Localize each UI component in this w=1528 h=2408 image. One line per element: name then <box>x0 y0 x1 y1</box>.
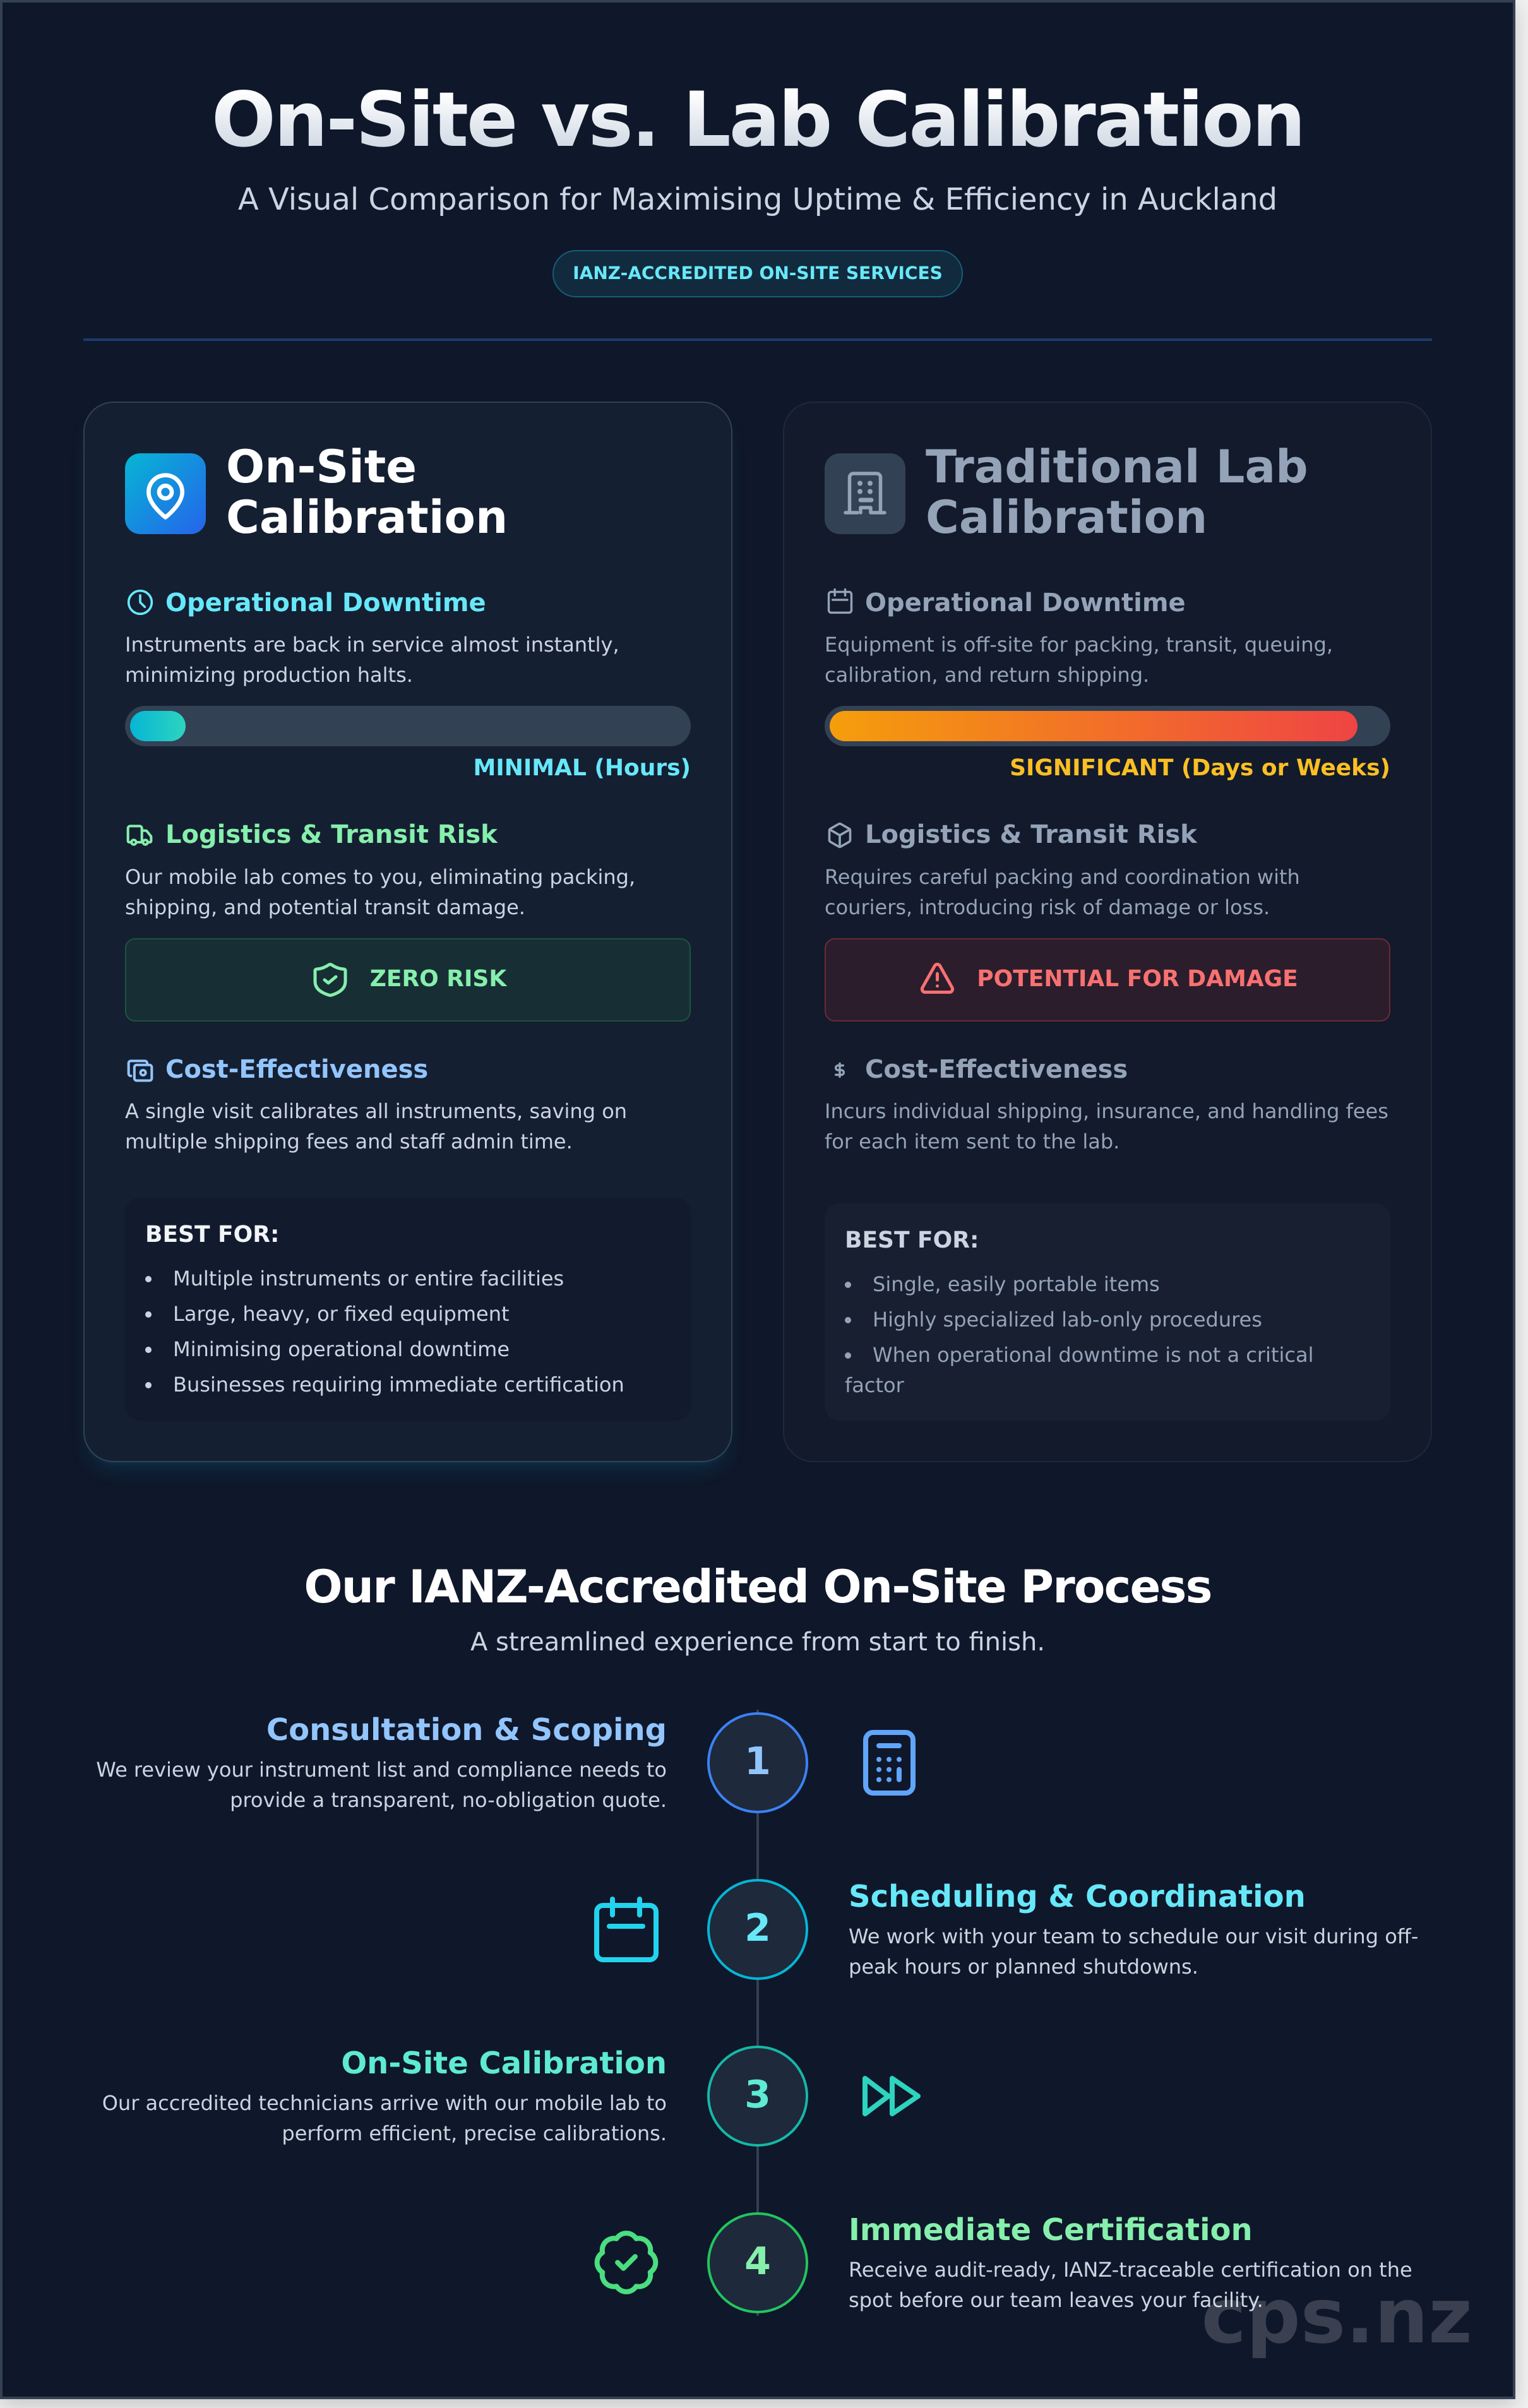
step 4 number <box>707 2212 808 2313</box>
best for list: BEST FOR: <box>845 1227 979 1253</box>
logistics text: couriers, introducing risk of damage or loss. <box>825 895 1270 919</box>
process section subtitle: A streamlined experience from start to finish. <box>470 1628 1045 1657</box>
header <box>212 76 1304 297</box>
step 1 <box>96 1712 916 1813</box>
best for list: When operational downtime is not a critical factor <box>845 1343 1313 1397</box>
step 1 number: 1 <box>744 1739 771 1784</box>
operational downtime text: Instruments are back in service almost instantly, <box>125 633 619 657</box>
panel: on-site calibration <box>83 402 732 1462</box>
icon: calculator <box>863 1730 916 1796</box>
logistics heading: Logistics & Transit Risk <box>165 820 498 849</box>
icon: clock <box>128 590 153 615</box>
step 1 text <box>96 1758 667 1812</box>
best for list: Highly specialized lab-only procedures <box>873 1308 1262 1332</box>
heading: On-Site <box>226 440 417 493</box>
downtime label: SIGNIFICANT (Days or Weeks) <box>1010 755 1390 781</box>
zero risk callout <box>125 938 691 1022</box>
logistics heading: Logistics & Transit Risk <box>865 820 1197 849</box>
title: On-Site vs. Lab Calibration <box>212 76 1304 164</box>
operational downtime text: calibration, and return shipping. <box>825 663 1149 687</box>
icon: calendar <box>827 588 852 614</box>
step 3 <box>102 2046 921 2147</box>
zero risk callout: ZERO RISK <box>370 966 506 991</box>
icon: fast forward <box>862 2076 921 2116</box>
cost heading: Cost-Effectiveness <box>165 1055 428 1084</box>
divider <box>83 338 1432 341</box>
icon: map pin <box>125 453 206 534</box>
step 3 text: perform efficient, precise calibrations. <box>282 2121 667 2145</box>
icon: building <box>825 453 905 534</box>
best for list: Large, heavy, or fixed equipment <box>173 1302 510 1326</box>
step 4 text: Receive audit-ready, IANZ-traceable certification on the <box>849 2258 1412 2282</box>
panel: traditional lab calibration <box>783 402 1432 1462</box>
step 2 <box>594 1879 1418 1980</box>
best for list: BEST FOR: <box>145 1222 279 1248</box>
step 3 text <box>102 2091 667 2145</box>
step 4 text <box>849 2258 1412 2312</box>
icon: verified badge <box>595 2231 658 2294</box>
cost text: A single visit calibrates all instruments, saving on <box>125 1099 627 1123</box>
potential damage callout <box>825 938 1390 1022</box>
best for list <box>125 1198 691 1421</box>
downtime bar <box>825 706 1390 746</box>
step 2 title: Scheduling & Coordination <box>849 1879 1306 1914</box>
heading <box>926 440 1308 544</box>
best for list: Single, easily portable items <box>873 1272 1160 1296</box>
step 3 text: Our accredited technicians arrive with our mobile lab to <box>102 2091 667 2115</box>
step 1 text: We review your instrument list and compliance needs to <box>96 1758 667 1782</box>
step 1 number <box>707 1712 808 1813</box>
title <box>0 75 1515 166</box>
operational downtime heading: Operational Downtime <box>165 588 486 617</box>
step 2 text <box>849 1924 1418 1979</box>
subtitle: A Visual Comparison for Maximising Uptime & Efficiency in Auckland <box>238 182 1277 217</box>
logistics text: Our mobile lab comes to you, eliminating packing, <box>125 865 635 889</box>
step 3 title: On-Site Calibration <box>341 2046 667 2081</box>
badge: IANZ-ACCREDITED ON-SITE SERVICES <box>573 263 943 283</box>
icon: package <box>828 822 851 849</box>
step 2 text: We work with your team to schedule our visit during off- <box>849 1924 1418 1948</box>
timeline line <box>756 1710 759 2316</box>
cost text <box>125 1099 627 1153</box>
best for list: Minimising operational downtime <box>173 1337 510 1361</box>
operational downtime heading: Operational Downtime <box>865 588 1186 617</box>
logistics text: shipping, and potential transit damage. <box>125 895 525 919</box>
logistics text: Requires careful packing and coordination with <box>825 865 1300 889</box>
logistics text <box>125 865 635 919</box>
icon: banknotes <box>128 1059 153 1082</box>
heading: Calibration <box>926 491 1207 544</box>
best for list <box>825 1203 1390 1421</box>
cost text: for each item sent to the lab. <box>825 1129 1119 1153</box>
step 2 text: peak hours or planned shutdowns. <box>849 1955 1198 1979</box>
step 2 number: 2 <box>744 1906 771 1950</box>
potential damage callout: POTENTIAL FOR DAMAGE <box>977 966 1298 991</box>
step 1 text: provide a transparent, no-obligation quote. <box>230 1788 667 1812</box>
step 2 number <box>707 1879 808 1980</box>
best for list: Multiple instruments or entire facilities <box>173 1267 564 1290</box>
operational downtime text <box>825 633 1333 687</box>
step 4 <box>595 2212 1412 2313</box>
best for list: Businesses requiring immediate certification <box>173 1373 624 1397</box>
operational downtime text: Equipment is off-site for packing, transit, queuing, <box>825 633 1333 657</box>
cost text: multiple shipping fees and staff admin time. <box>125 1129 573 1153</box>
badge <box>552 250 963 297</box>
step 4 text: spot before our team leaves your facility. <box>849 2288 1263 2312</box>
operational downtime text: minimizing production halts. <box>125 663 413 687</box>
process section heading: Our IANZ-Accredited On-Site Process <box>304 1560 1212 1613</box>
heading: Calibration <box>226 491 508 544</box>
step 4 title: Immediate Certification <box>849 2212 1253 2248</box>
operational downtime text <box>125 633 619 687</box>
cost heading: Cost-Effectiveness <box>865 1055 1128 1084</box>
heading: Traditional Lab <box>926 440 1308 493</box>
downtime label: MINIMAL (Hours) <box>474 755 691 781</box>
cost text <box>825 1099 1388 1153</box>
icon: calendar <box>594 1897 659 1962</box>
step 4 number: 4 <box>744 2239 771 2284</box>
logistics text <box>825 865 1300 919</box>
icon: truck <box>126 825 153 846</box>
downtime bar <box>125 706 691 746</box>
step 1 title: Consultation & Scoping <box>266 1712 667 1748</box>
watermark: cps.nz <box>1202 2273 1472 2361</box>
heading <box>226 440 508 544</box>
step 3 number: 3 <box>744 2073 771 2117</box>
step 3 number <box>707 2046 808 2147</box>
icon: dollar sign <box>835 1062 845 1078</box>
cost text: Incurs individual shipping, insurance, and handling fees <box>825 1099 1388 1123</box>
